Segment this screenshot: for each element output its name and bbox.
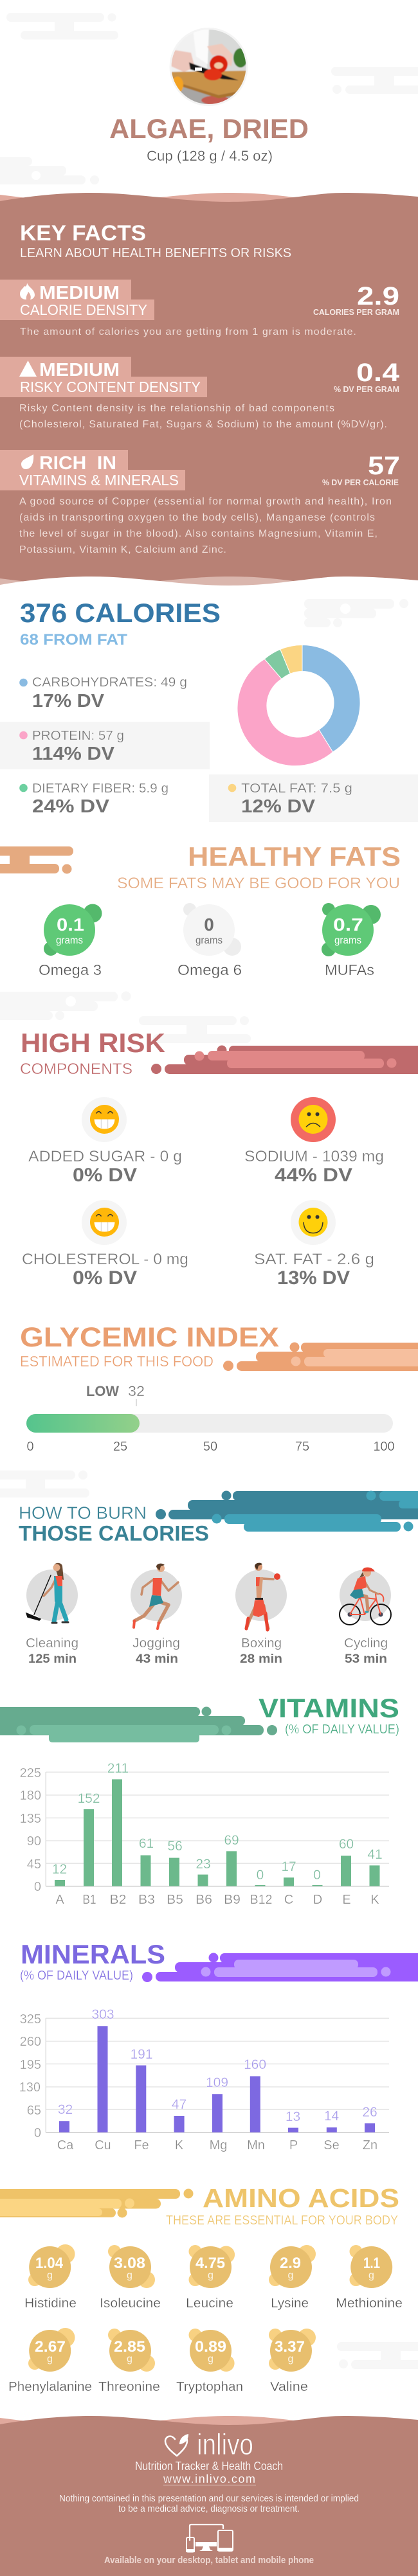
fact: rich in vitamins and minerals: A good source of Copper (essential for normal growth and health), Iron bbox=[19, 496, 392, 507]
subheading: from fat: 68 FROM FAT bbox=[20, 631, 127, 648]
panel: high risk bbox=[20, 1028, 418, 1289]
bar chart: vitamins: B2 bbox=[109, 1893, 126, 1907]
activity: jogging bbox=[131, 1564, 182, 1629]
gauge scale: 50 bbox=[203, 1440, 217, 1454]
logo: inlivo heart and wordmark bbox=[165, 2428, 253, 2461]
bar chart: vitamins: A bbox=[55, 1893, 64, 1907]
legend: protein: PROTEIN: 57 g bbox=[32, 729, 124, 743]
fact: rich in vitamins and minerals: the level of sugar in the blood). Also contains Magnesium, Vitamin E, bbox=[19, 528, 377, 539]
legend: protein: 114% DV bbox=[32, 744, 115, 764]
bar chart: minerals: 325 bbox=[20, 2012, 41, 2026]
decorative cloud: top right bbox=[331, 67, 418, 94]
decorative cloud bbox=[304, 599, 408, 627]
amino: histidine bbox=[24, 2244, 77, 2311]
fact: rich in vitamins and minerals: % DV PER CALORIE bbox=[322, 478, 399, 487]
icon: flame bbox=[20, 283, 35, 300]
icon: grinning face bbox=[90, 1208, 119, 1237]
subheading: THESE ARE ESSENTIAL FOR YOUR BODY bbox=[166, 2214, 398, 2228]
amino: histidine: Histidine bbox=[24, 2296, 77, 2311]
amino: valine bbox=[269, 2329, 316, 2394]
panel: amino acids bbox=[0, 2183, 418, 2394]
website link: www.inlivo.com bbox=[163, 2473, 255, 2485]
panel: vitamins bbox=[0, 1693, 399, 1907]
legend: carbohydrates: CARBOHYDRATES: 49 g bbox=[32, 675, 187, 690]
heading: calories: 376 CALORIES bbox=[20, 598, 221, 628]
panel: how to burn those calories bbox=[19, 1491, 418, 1666]
fat bubble: omega 6: Omega 6 bbox=[177, 962, 242, 978]
gauge scale: 25 bbox=[113, 1440, 127, 1454]
bar chart: vitamins: 41 bbox=[367, 1847, 383, 1862]
amino: leucine: g bbox=[208, 2270, 214, 2281]
bar chart: vitamins: B5 bbox=[167, 1893, 183, 1907]
fat bubble: omega 3 bbox=[39, 904, 102, 978]
marker label: 32 bbox=[128, 1383, 145, 1399]
gauge scale: 0 bbox=[26, 1440, 34, 1454]
decorative pill shapes bbox=[0, 2189, 193, 2217]
legend: total fat: TOTAL FAT: 7.5 g bbox=[241, 782, 352, 796]
donut chart bbox=[237, 645, 360, 766]
heading: high risk: HIGH RISK bbox=[21, 1028, 165, 1058]
caption: jogging: 43 min bbox=[136, 1652, 178, 1666]
icon: smiling face bbox=[298, 1208, 328, 1237]
caption: boxing: 28 min bbox=[240, 1652, 282, 1666]
amino: histidine: g bbox=[47, 2270, 53, 2281]
caption: cycling: Cycling bbox=[344, 1636, 388, 1650]
caption: cycling bbox=[344, 1636, 388, 1666]
subheading: ESTIMATED FOR THIS FOOD bbox=[20, 1353, 214, 1370]
gauge scale: 100 bbox=[373, 1440, 395, 1454]
panel: glycemic index bbox=[20, 1322, 418, 1454]
fat bubble: omega 6: grams bbox=[195, 935, 223, 946]
bar chart: vitamins: 0 bbox=[257, 1868, 264, 1883]
caption: jogging: Jogging bbox=[132, 1636, 180, 1650]
legend: dietary fiber: 24% DV bbox=[32, 796, 110, 817]
bar chart: vitamins: 17 bbox=[281, 1859, 296, 1874]
amino: tryptophan: 0.89 bbox=[195, 2338, 226, 2356]
amino: threonine: g bbox=[127, 2354, 132, 2365]
bar chart: vitamins: B1 bbox=[82, 1893, 96, 1907]
heading: vitamins: VITAMINS bbox=[259, 1693, 399, 1723]
icon: desktop, tablet and phone bbox=[186, 2525, 233, 2552]
caption: cleaning: 125 min bbox=[28, 1652, 77, 1666]
bar chart: minerals: Zn bbox=[363, 2138, 377, 2152]
bar chart: vitamins: E bbox=[342, 1893, 351, 1907]
amino: lysine: g bbox=[288, 2270, 293, 2281]
bar chart: vitamins: 0 bbox=[313, 1868, 321, 1883]
caption: cycling: 53 min bbox=[345, 1652, 387, 1666]
amino: isoleucine: g bbox=[127, 2270, 132, 2281]
risk: added sugar bbox=[28, 1097, 182, 1186]
bar chart: minerals: 26 bbox=[362, 2105, 377, 2120]
decorative cloud bbox=[337, 2342, 418, 2369]
fact: risky content density: (Cholesterol, Saturated Fat, Sugars & Sodium) to the amount (%DV/gr). bbox=[19, 419, 387, 430]
fact: calorie density: CALORIE DENSITY bbox=[20, 301, 147, 318]
bar chart: minerals: Se bbox=[323, 2138, 340, 2152]
bar chart: minerals: 32 bbox=[58, 2102, 73, 2117]
amino: tryptophan: g bbox=[208, 2354, 214, 2365]
heading: minerals: MINERALS bbox=[21, 1939, 165, 1969]
amino: phenylalanine: Phenylalanine bbox=[8, 2380, 92, 2394]
fact: risky content density: % DV PER GRAM bbox=[334, 385, 399, 394]
caption: cleaning bbox=[26, 1636, 78, 1666]
decorative pill shapes bbox=[151, 1045, 418, 1074]
legend: total fat bbox=[209, 774, 418, 822]
gauge scale bbox=[26, 1440, 395, 1454]
legend: dietary fiber bbox=[19, 782, 168, 817]
decorative cloud: top left bbox=[6, 13, 118, 40]
amino: threonine: Threonine bbox=[98, 2380, 160, 2394]
risk: saturated fat bbox=[254, 1200, 374, 1289]
decorative cloud: left middle bbox=[0, 157, 99, 184]
icon: sad face bbox=[298, 1105, 328, 1134]
amino: threonine bbox=[98, 2329, 160, 2394]
panel: key facts bbox=[0, 193, 418, 595]
risk: sodium: SODIUM - 1039 mg bbox=[244, 1148, 384, 1165]
icon: grinning face bbox=[90, 1105, 119, 1134]
fact: risky content density: Risky Content density is the relationship of bad components bbox=[19, 403, 334, 414]
gauge scale: 75 bbox=[295, 1440, 309, 1454]
subheading: COMPONENTS bbox=[20, 1060, 132, 1078]
heading: amino acids: AMINO ACIDS bbox=[203, 2183, 399, 2213]
subheading: (% OF DAILY VALUE) bbox=[285, 1722, 399, 1737]
bar chart: vitamins: 56 bbox=[167, 1839, 183, 1854]
bar chart: minerals bbox=[19, 2007, 389, 2152]
caption: cleaning: Cleaning bbox=[26, 1636, 78, 1650]
disclaimer: Nothing contained in this presentation and our services is intended or implied bbox=[59, 2493, 359, 2504]
decorative pill shapes bbox=[223, 1342, 418, 1371]
bar chart: minerals: 65 bbox=[27, 2104, 41, 2118]
bar chart: vitamins: B12 bbox=[250, 1893, 273, 1907]
disclaimer: to be a medical advice, diagnosis or treatment. bbox=[118, 2503, 300, 2514]
subheading: SOME FATS MAY BE GOOD FOR YOU bbox=[117, 875, 400, 892]
bar chart: vitamins: B9 bbox=[224, 1893, 241, 1907]
icon: warning triangle bbox=[19, 361, 37, 377]
caption: boxing: Boxing bbox=[241, 1636, 282, 1650]
activity: cycling bbox=[340, 1568, 391, 1625]
amino: isoleucine bbox=[100, 2245, 161, 2311]
decorative pill shapes bbox=[142, 1953, 418, 1982]
bar chart: vitamins: C bbox=[284, 1893, 293, 1907]
risk: cholesterol: 0% DV bbox=[73, 1267, 137, 1289]
fat bubble: omega 3: grams bbox=[56, 935, 83, 946]
risk: sodium bbox=[244, 1097, 384, 1186]
fact: calorie density: The amount of calories you are getting from 1 gram is moderate. bbox=[20, 326, 356, 337]
bar chart: vitamins: 225 bbox=[20, 1766, 41, 1780]
amino: valine: Valine bbox=[270, 2380, 308, 2394]
amino: phenylalanine bbox=[8, 2328, 92, 2394]
fat bubble: omega 3: Omega 3 bbox=[39, 962, 102, 978]
availability note: Available on your desktop, tablet and mobile phone bbox=[104, 2555, 314, 2566]
bar chart: vitamins: B6 bbox=[195, 1893, 212, 1907]
subheading: LEARN ABOUT HEALTH BENEFITS OR RISKS bbox=[20, 246, 291, 260]
bar chart: vitamins: B3 bbox=[138, 1893, 155, 1907]
risk: added sugar: 0% DV bbox=[73, 1165, 137, 1186]
amino: leucine bbox=[186, 2245, 235, 2311]
bar chart: minerals: 260 bbox=[20, 2035, 41, 2049]
bar chart: vitamins: 135 bbox=[20, 1812, 41, 1826]
fact: risky content density: MEDIUM bbox=[39, 360, 120, 380]
heading: key facts: KEY FACTS bbox=[20, 221, 146, 246]
fat bubble: omega 6 bbox=[177, 903, 242, 978]
tagline: Nutrition Tracker & Health Coach bbox=[135, 2460, 283, 2473]
bar chart: vitamins: 211 bbox=[107, 1761, 129, 1776]
amino: isoleucine: Isoleucine bbox=[100, 2296, 161, 2311]
subheading: (% OF DAILY VALUE) bbox=[20, 1969, 133, 1983]
bar chart: minerals: 109 bbox=[206, 2075, 228, 2090]
panel: healthy fats bbox=[0, 841, 401, 978]
marker label: LOW bbox=[86, 1383, 119, 1399]
amino: phenylalanine: g bbox=[47, 2354, 53, 2365]
heading: healthy fats: HEALTHY FATS bbox=[188, 841, 401, 872]
heading: glycemic index: GLYCEMIC INDEX bbox=[20, 1322, 279, 1353]
bar chart: minerals: Fe bbox=[134, 2138, 149, 2152]
amino: phenylalanine: 2.67 bbox=[35, 2338, 66, 2356]
bar chart: minerals: 160 bbox=[244, 2057, 266, 2072]
decorative pill shapes bbox=[156, 1491, 418, 1532]
decorative cloud: above high risk bbox=[0, 991, 251, 1043]
activity: boxing bbox=[235, 1563, 287, 1630]
logo: inlivo heart and wordmark: inlivo bbox=[197, 2428, 253, 2461]
bar chart: vitamins: 60 bbox=[339, 1837, 354, 1852]
fact: rich in vitamins and minerals: RICH IN bbox=[39, 453, 116, 474]
heading: HOW TO BURN bbox=[19, 1503, 147, 1523]
bar chart: minerals: 303 bbox=[91, 2007, 114, 2022]
bar chart: minerals: Mn bbox=[247, 2138, 265, 2152]
amino: valine: g bbox=[288, 2354, 293, 2365]
amino: lysine bbox=[269, 2245, 316, 2311]
bar chart: minerals: 130 bbox=[19, 2080, 41, 2095]
serving size: Cup (128 g / 4.5 oz) bbox=[147, 148, 273, 164]
bar chart: minerals: 191 bbox=[130, 2047, 153, 2062]
decorative cloud: above burn section bbox=[0, 1471, 89, 1498]
icon: leaf bbox=[21, 454, 33, 469]
activity: cleaning bbox=[26, 1563, 78, 1623]
bar chart: minerals: K bbox=[175, 2138, 184, 2152]
amino: valine: 3.37 bbox=[275, 2338, 305, 2356]
bar chart: minerals: 47 bbox=[172, 2097, 186, 2112]
bar chart: vitamins: 69 bbox=[224, 1833, 239, 1848]
amino: leucine: Leucine bbox=[186, 2296, 233, 2311]
risk: cholesterol bbox=[22, 1200, 188, 1289]
bar chart: minerals: 13 bbox=[286, 2109, 300, 2124]
bar chart: minerals: Mg bbox=[210, 2138, 227, 2152]
amino: threonine: 2.85 bbox=[114, 2338, 145, 2356]
bar chart: minerals: P bbox=[289, 2138, 298, 2152]
amino: methionine: g bbox=[368, 2270, 374, 2281]
amino: lysine: 2.9 bbox=[280, 2255, 301, 2272]
bar chart: vitamins: 90 bbox=[27, 1834, 41, 1848]
fat bubble: MUFAs: 0.7 bbox=[333, 915, 363, 935]
marker label bbox=[86, 1383, 145, 1406]
bar chart: vitamins: 23 bbox=[195, 1857, 211, 1872]
amino: methionine: Methionine bbox=[336, 2296, 403, 2311]
caption: boxing bbox=[240, 1636, 282, 1666]
panel: minerals bbox=[19, 1939, 418, 2152]
bar chart: vitamins: 152 bbox=[77, 1791, 100, 1806]
fact: calorie density: CALORIES PER GRAM bbox=[313, 308, 399, 317]
fact: rich in vitamins and minerals bbox=[0, 450, 400, 555]
amino: tryptophan: Tryptophan bbox=[176, 2380, 243, 2394]
decorative pill shapes bbox=[0, 1707, 277, 1742]
bar chart: minerals: Cu bbox=[95, 2138, 111, 2152]
legend: carbohydrates: 17% DV bbox=[32, 691, 105, 711]
fact: rich in vitamins and minerals: Potassium, Vitamin K, Calcium and Zinc. bbox=[19, 544, 226, 555]
risk: saturated fat: 13% DV bbox=[277, 1267, 350, 1289]
panel: footer bbox=[0, 2416, 418, 2576]
title: ALGAE, DRIED bbox=[109, 114, 309, 145]
panel: calories bbox=[0, 598, 418, 822]
amino: methionine bbox=[336, 2245, 403, 2311]
bar chart: vitamins: D bbox=[313, 1893, 322, 1907]
amino: leucine: 4.75 bbox=[195, 2255, 225, 2272]
heading bold: THOSE CALORIES bbox=[19, 1521, 209, 1545]
fact: rich in vitamins and minerals: VITAMINS & MINERALS bbox=[19, 472, 179, 488]
bar chart: vitamins: K bbox=[370, 1893, 379, 1907]
bar chart: vitamins: 180 bbox=[20, 1789, 41, 1803]
risk: saturated fat: SAT. FAT - 2.6 g bbox=[254, 1251, 374, 1268]
bar chart: minerals: 0 bbox=[34, 2126, 41, 2140]
bar chart: vitamins bbox=[20, 1761, 389, 1907]
fact: risky content density: RISKY CONTENT DENSITY bbox=[20, 379, 201, 395]
fat bubble: omega 6: 0 bbox=[204, 915, 214, 935]
fact: rich in vitamins and minerals: 57 bbox=[368, 452, 400, 480]
bar chart: minerals: Ca bbox=[57, 2138, 74, 2152]
fat bubble: omega 3: 0.1 bbox=[57, 915, 84, 935]
amino: histidine: 1.04 bbox=[35, 2255, 64, 2272]
bar chart: vitamins: 0 bbox=[34, 1880, 41, 1894]
caption: jogging bbox=[132, 1636, 180, 1666]
amino: isoleucine: 3.08 bbox=[114, 2255, 145, 2272]
legend: protein bbox=[0, 722, 210, 769]
decorative pill shapes bbox=[0, 846, 73, 874]
fat bubble: MUFAs bbox=[322, 903, 381, 978]
fact: calorie density: 2.9 bbox=[357, 282, 399, 310]
amino: methionine: 1.1 bbox=[363, 2255, 380, 2272]
amino: tryptophan bbox=[176, 2329, 243, 2394]
risk: cholesterol: CHOLESTEROL - 0 mg bbox=[22, 1251, 188, 1268]
fact: rich in vitamins and minerals: (aids in transporting oxygen to the body cells), Manganese (controls bbox=[19, 512, 375, 523]
legend: dietary fiber: DIETARY FIBER: 5.9 g bbox=[32, 782, 168, 796]
disclaimer bbox=[59, 2493, 359, 2514]
bar chart: minerals: 14 bbox=[324, 2109, 339, 2124]
legend: total fat: 12% DV bbox=[241, 796, 316, 817]
fact: risky content density bbox=[0, 357, 400, 430]
food photo: sliced red pepper on cutting board bbox=[170, 28, 248, 106]
fact: calorie density: MEDIUM bbox=[39, 283, 120, 303]
fact: calorie density bbox=[0, 280, 399, 337]
bar chart: minerals: 195 bbox=[20, 2058, 41, 2072]
gauge bar bbox=[26, 1414, 393, 1433]
fat bubble: MUFAs: grams bbox=[334, 935, 361, 946]
legend: carbohydrates bbox=[19, 675, 187, 711]
bar chart: vitamins: 12 bbox=[52, 1862, 67, 1877]
risk: sodium: 44% DV bbox=[275, 1165, 352, 1186]
fat bubble: MUFAs: MUFAs bbox=[325, 962, 374, 978]
fact: risky content density: 0.4 bbox=[356, 359, 400, 387]
bar chart: vitamins: 45 bbox=[27, 1857, 41, 1872]
amino: lysine: Lysine bbox=[271, 2296, 309, 2311]
risk: added sugar: ADDED SUGAR - 0 g bbox=[28, 1148, 182, 1165]
bar chart: vitamins: 61 bbox=[139, 1836, 154, 1851]
